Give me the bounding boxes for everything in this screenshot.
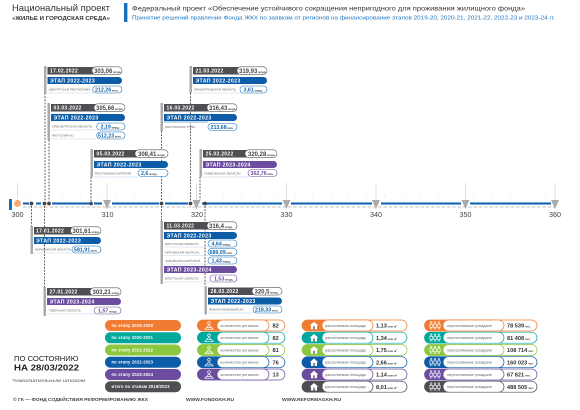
legend: stages: по этапу 2020-2021 xyxy=(112,335,154,340)
regions row 2020-2021: количество регионов xyxy=(220,335,258,340)
card: 17.02.2022: 303,06 млрд. xyxy=(94,69,121,75)
card: 11.03.2022: 4,64 млрд. xyxy=(212,242,231,248)
timeline xyxy=(9,93,561,288)
legend: stages xyxy=(105,320,181,392)
area row 2020-2021: 1,34 млн м² xyxy=(376,336,397,342)
card: 27.01.2022 xyxy=(44,287,121,316)
timeline: 350 xyxy=(460,210,472,219)
card: 28.03.2022: ЯМАЛО-НЕНЕЦКИЙ АО xyxy=(209,308,244,312)
area row 2019-2020: расселяемая площадь xyxy=(325,323,366,328)
card: 11.03.2022: ЭТАП 2022-2023 xyxy=(166,234,212,240)
status date note xyxy=(12,354,86,384)
card: 03.03.2022: 03.03.2022 xyxy=(54,106,82,112)
card: 11.03.2022: ЗАБАЙКАЛЬСКИЙ КРАЙ xyxy=(165,259,200,263)
citizens row 2020-2021 xyxy=(424,332,537,343)
legend: stages: по этапу 2023-2024 xyxy=(112,372,154,377)
card: 11.03.2022: 1,43 млрд. xyxy=(212,258,231,264)
regions row 2019-2020 xyxy=(197,320,285,331)
card: 17.02.2022 xyxy=(44,66,122,94)
card: 17.02.2022: ЭТАП 2022-2023 xyxy=(50,78,95,84)
card: 25.03.2022: 25.03.2022 xyxy=(206,152,234,158)
citizens row 2022-2023 xyxy=(424,357,537,368)
card: 17.01.2022: МУРМАНСКАЯ ОБЛАСТЬ xyxy=(35,248,71,252)
card: 25.03.2022: 362,76 млн. xyxy=(250,171,274,177)
citizens row 2021-2022: переселяемые граждане xyxy=(447,348,492,352)
card: 16.03.2022: ЭТАП 2022-2023 xyxy=(166,116,212,122)
card: 05.03.2022 xyxy=(90,149,168,177)
regions row 2022-2023 xyxy=(197,357,285,368)
card: 11.03.2022: ЭТАП 2023-2024 xyxy=(166,268,212,274)
regions row 2022-2023: количество регионов xyxy=(220,360,258,365)
area row 2021-2022: расселяемая площадь xyxy=(325,348,366,352)
legend: stages: по этапу 2021-2022 xyxy=(112,348,154,352)
citizens row 2023-2024 xyxy=(424,369,537,380)
citizens row 2022-2023: переселяемые граждане xyxy=(447,360,492,365)
area row 2022-2023: расселяемая площадь xyxy=(325,360,366,365)
citizens row 2023-2024: 67 821 чел. xyxy=(507,373,531,379)
card: 03.03.2022 xyxy=(48,103,125,140)
citizens row 2019-2020 xyxy=(424,320,537,331)
citizens row 2019-2020: 78 539 чел. xyxy=(507,324,531,330)
area row 2023-2024: 1,14 млн м² xyxy=(376,373,397,379)
area row 2020-2021 xyxy=(302,332,407,343)
card: 03.03.2022: 2,19 млрд. xyxy=(100,124,120,130)
federal project heading: Принятие решений правления Фонда ЖКХ по заявкам от регионов на финансирование этапов 2019-20, 2020-21, 2021-22, 2022-23 и 2023-24 гг. xyxy=(132,14,555,22)
card: 03.03.2022: 512,23 млн. xyxy=(98,134,122,140)
area row 2021-2022: 1,75 млн м² xyxy=(376,348,397,354)
timeline: 330 xyxy=(280,210,292,219)
card: 11.03.2022: 1,53 млрд. xyxy=(214,276,233,282)
header accent bar xyxy=(124,3,127,22)
card: 28.03.2022: ЭТАП 2022-2023 xyxy=(210,299,256,305)
resettled citizens column xyxy=(424,320,537,392)
citizens row total: переселяемые граждане xyxy=(447,384,492,389)
legend: stages: по этапу 2022-2023 xyxy=(112,360,154,365)
title: national project: «ЖИЛЬЕ И ГОРОДСКАЯ СРЕДА» xyxy=(12,16,110,22)
card: 21.03.2022: ЭТАП 2022-2023 xyxy=(196,78,241,84)
area row 2021-2022 xyxy=(302,344,407,356)
area row 2022-2023 xyxy=(302,357,407,368)
status date note: *накопительным итогом xyxy=(12,378,86,384)
card: 17.01.2022: 301,61 млрд. xyxy=(72,229,100,235)
card: 03.03.2022: 305,66 млрд. xyxy=(96,106,123,112)
card: 17.02.2022: 17.02.2022 xyxy=(50,69,78,75)
title: national project: Национальный проект xyxy=(12,2,111,13)
area row 2023-2024 xyxy=(302,369,407,380)
footer xyxy=(13,395,342,402)
federal project heading: Федеральный проект «Обеспечение устойчивого сокращения непригодного для проживания жилищного фонда» xyxy=(132,4,525,12)
card: 17.01.2022: 581,91 млн. xyxy=(74,248,98,254)
card: 05.03.2022: 308,41 млрд. xyxy=(138,152,165,158)
card: 27.01.2022: 303,21 млрд. xyxy=(92,290,120,296)
regions count column xyxy=(197,320,285,380)
card: 21.03.2022 xyxy=(190,66,267,94)
regions row 2023-2024: 13 xyxy=(272,373,279,379)
card: 21.03.2022: 3,61 млрд. xyxy=(244,88,263,94)
card: 28.03.2022: 218,33 млн. xyxy=(255,308,279,314)
card: 25.03.2022 xyxy=(200,149,277,177)
timeline: 300 xyxy=(12,210,24,219)
citizens row 2019-2020: переселяемые граждане xyxy=(447,323,492,328)
card: 27.01.2022: 1,57 млрд. xyxy=(98,308,117,314)
card: 28.03.2022 xyxy=(204,286,282,314)
card: 05.03.2022: РЕСПУБЛИКА БУРЯТИЯ xyxy=(95,172,131,176)
card: 03.03.2022: ЯКУТСКИЙ АО xyxy=(52,134,74,138)
card: 11.03.2022: ИРКУТСКАЯ ОБЛАСТЬ xyxy=(165,242,199,246)
card: 17.01.2022 xyxy=(30,226,101,254)
card: 11.03.2022: ОРЛОВСКАЯ ОБЛАСТЬ xyxy=(165,250,199,254)
regions row 2022-2023: 76 xyxy=(272,360,279,366)
card: 05.03.2022: 2,6 млрд. xyxy=(141,171,157,177)
regions row 2023-2024 xyxy=(197,369,285,380)
card: 11.03.2022 xyxy=(160,221,237,284)
card: 27.01.2022: ЭТАП 2023-2024 xyxy=(50,300,95,306)
regions row 2020-2021: 82 xyxy=(272,336,279,342)
card: 03.03.2022: ОРЕНБУРГСКАЯ ОБЛАСТЬ xyxy=(52,124,92,128)
card: 27.01.2022: ТВЕРСКАЯ ОБЛАСТЬ xyxy=(49,308,81,312)
federal project heading xyxy=(132,4,555,22)
card: 16.03.2022 xyxy=(160,103,237,131)
timeline: 310 xyxy=(102,210,114,219)
footer: © ГК — ФОНД СОДЕЙСТВИЯ РЕФОРМИРОВАНИЮ ЖКХ xyxy=(13,395,149,402)
card: 16.03.2022: 316,43 млрд. xyxy=(209,106,236,112)
card: 25.03.2022: 320,28 млрд. xyxy=(248,152,275,158)
card: 16.03.2022: РЕСПУБЛИКА ТЫВА xyxy=(165,125,196,129)
card: 25.03.2022: ЭТАП 2023-2024 xyxy=(206,162,251,168)
footer: WWW.FONDGKH.RU xyxy=(186,397,235,402)
citizens row 2020-2021: 81 408 чел. xyxy=(507,336,531,342)
card: 17.01.2022: ЭТАП 2022-2023 xyxy=(36,238,81,244)
title: national project xyxy=(12,2,111,22)
citizens row 2023-2024: переселяемые граждане xyxy=(447,372,492,377)
area row total: 8,01 млн м² xyxy=(376,385,397,391)
regions row 2019-2020: 82 xyxy=(272,324,279,330)
area row 2019-2020: 1,13 млн м² xyxy=(376,324,397,330)
area row 2019-2020 xyxy=(302,320,407,331)
citizens row 2020-2021: переселяемые граждане xyxy=(447,335,492,340)
card: 28.03.2022: 320,5 млрд. xyxy=(254,289,279,295)
card: 25.03.2022: ТАМБОВСКАЯ ОБЛАСТЬ xyxy=(204,172,240,176)
card: 21.03.2022: 319,93 млрд. xyxy=(239,69,266,75)
regions row 2021-2022 xyxy=(197,344,285,356)
card: 05.03.2022: ЭТАП 2022-2023 xyxy=(96,162,142,168)
card: 16.03.2022: 213,68 млн. xyxy=(210,125,234,131)
card: 11.03.2022: ИРКУТСКАЯ ОБЛАСТЬ xyxy=(165,276,199,280)
legend: stages: итого по этапам 2019/2023 xyxy=(112,384,170,389)
citizens row 2022-2023: 160 023 чел. xyxy=(507,360,534,366)
card: 16.03.2022: 16.03.2022 xyxy=(166,106,195,112)
status date note: ПО СОСТОЯНИЮ xyxy=(14,354,79,363)
footer: WWW.REFORMAGKH.RU xyxy=(282,397,342,402)
card: 05.03.2022: 05.03.2022 xyxy=(96,152,125,158)
regions row 2021-2022: количество регионов xyxy=(220,348,258,352)
regions row 2021-2022: 81 xyxy=(272,348,279,354)
resettled area column xyxy=(302,320,407,392)
citizens row 2021-2022: 108 714 чел. xyxy=(507,348,534,354)
status date note: НА 28/03/2022 xyxy=(14,364,80,372)
card: 17.01.2022: 17.01.2022 xyxy=(36,229,64,235)
card: 03.03.2022: ЭТАП 2022-2023 xyxy=(54,116,99,122)
area row total: расселяемая площадь xyxy=(325,384,366,389)
card: 17.02.2022: 212,26 млн. xyxy=(95,88,119,94)
regions row 2019-2020: количество регионов xyxy=(220,323,258,328)
citizens row 2021-2022 xyxy=(424,344,537,356)
card: 11.03.2022: 689,09 млн. xyxy=(210,250,233,256)
timeline: 360 xyxy=(549,210,561,219)
area row 2023-2024: расселяемая площадь xyxy=(325,372,366,377)
area row total xyxy=(302,381,407,392)
card: 27.01.2022: 27.01.2022 xyxy=(50,290,78,296)
card: 21.03.2022: ЛЕНИНГРАДСКАЯ ОБЛАСТЬ xyxy=(194,88,236,92)
card: 11.03.2022: 316,4 млрд. xyxy=(209,224,233,230)
legend: stages: по этапу 2019-2020 xyxy=(112,323,154,328)
citizens row total xyxy=(424,381,537,392)
card: 11.03.2022: 11.03.2022 xyxy=(166,224,194,230)
area row 2022-2023: 2,66 млн м² xyxy=(376,360,397,366)
card: 17.02.2022: УДМУРТСКАЯ РЕСПУБЛИКА xyxy=(48,88,92,92)
regions row 2023-2024: количество регионов xyxy=(220,372,258,377)
card: 28.03.2022: 28.03.2022 xyxy=(210,289,239,295)
regions row 2020-2021 xyxy=(197,332,285,343)
card: 21.03.2022: 21.03.2022 xyxy=(196,69,224,75)
timeline: 340 xyxy=(370,210,382,219)
citizens row total: 488 505 чел. xyxy=(507,385,534,391)
timeline: 320 xyxy=(191,210,203,219)
area row 2020-2021: расселяемая площадь xyxy=(325,335,366,340)
